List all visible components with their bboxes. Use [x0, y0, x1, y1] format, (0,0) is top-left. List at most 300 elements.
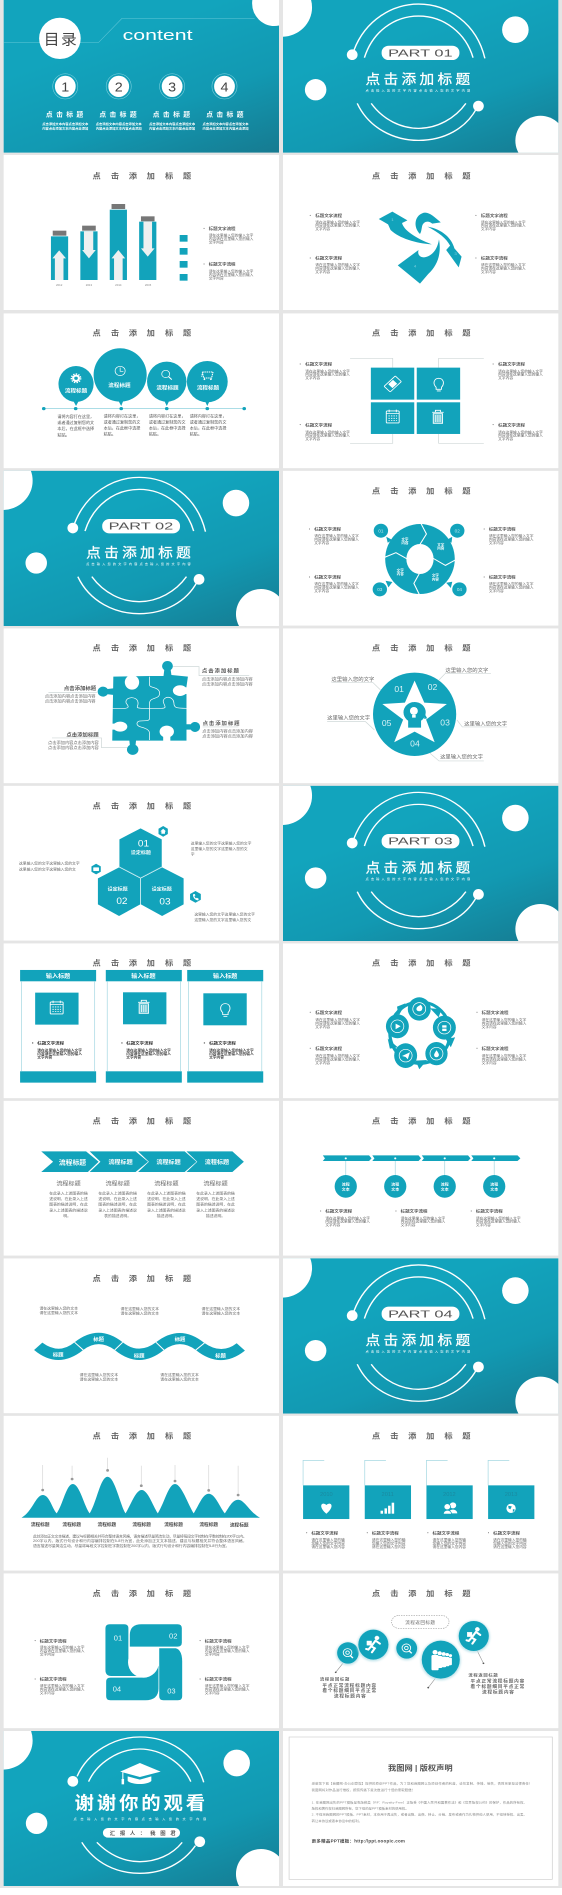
text block 2: 请在这里输入您的输入文字: [305, 430, 350, 434]
text left: 平点正常流程标题内容: [322, 1682, 377, 1689]
decorative circles: [252, 766, 562, 954]
text block 3: 文字内容: [481, 226, 496, 231]
slide: part 04: [283, 1258, 558, 1414]
hexagon 02: 02: [116, 896, 128, 907]
card 2: [106, 970, 182, 1083]
text block 2: 标题文字流程: [305, 421, 333, 428]
text block 1: 标题文字流程: [315, 212, 343, 219]
item 1: 点击标题: [46, 110, 84, 118]
card 2: 请在这里输入您的输入文字: [126, 1049, 171, 1053]
star disc: 02: [428, 682, 438, 692]
subtitle: 点击输入您的文字内容点击输入您的文字内容: [365, 876, 470, 881]
subtitle: 点击输入您的文字内容点击输入您的文字内容: [86, 561, 191, 566]
text block 4: 文字内容: [498, 436, 513, 441]
text block 1: 标题文字流程: [305, 361, 333, 368]
hexagon 03: [141, 867, 184, 916]
node 1: [335, 1161, 357, 1198]
pinwheel graphic: 04: [113, 1685, 121, 1694]
captions: 或者通过复制您的文: [149, 419, 186, 424]
text block 2: 请在这里输入您的输入文字: [315, 263, 360, 267]
captions: 粘贴。: [190, 432, 202, 437]
text: lower right: 这里输入您的文字这里输入您的文: [194, 917, 252, 922]
card 2012: [426, 1460, 473, 1549]
text block 1: 文字内容: [40, 1652, 55, 1656]
callout: top right: 点击添加内容点击添加内容: [202, 681, 253, 687]
captions: 本后，在此框中选择: [104, 425, 140, 430]
hexagon 01: 01: [138, 839, 149, 850]
part label: [382, 834, 459, 848]
title: 点击添加标题: [93, 1588, 191, 1598]
text block 3: 内容请在这里输入您的输入: [205, 1648, 250, 1653]
item 3: 点击标题: [153, 110, 191, 118]
card 2011: 您输入您的文字内容: [372, 1541, 406, 1545]
subtitle: 点击输入您的文字内容点击输入您的文字内容: [74, 1816, 206, 1821]
text block 4: [484, 574, 534, 593]
dashed label: 流程返回标题: [405, 1619, 436, 1626]
card 2010: [303, 1460, 349, 1549]
card 2013: 您输入您的文字内容: [493, 1541, 527, 1545]
bubble 3: 流程标题: [156, 384, 179, 392]
card 2013: 请在这里输入您内容: [493, 1544, 527, 1549]
text block 1: 标题文字流程: [314, 526, 342, 533]
card 2011: 请在这里输入您内容: [372, 1544, 406, 1549]
title: 点击添加标题: [372, 643, 471, 653]
text block 2: 文字内容: [40, 1690, 55, 1695]
text block 1: [35, 1637, 85, 1656]
card 2: 输入标题: [131, 972, 156, 980]
text block 2: [395, 1208, 446, 1227]
title: 点击添加标题: [93, 171, 191, 180]
slide: three cards: [4, 944, 279, 1098]
text block 4: 文字内容: [205, 1690, 220, 1695]
square: trash icon: [417, 402, 460, 434]
section title: 点击添加标题: [365, 1333, 470, 1349]
bubble 1: [58, 366, 94, 406]
column 1: 在此录入上述图表的描: [49, 1191, 88, 1195]
callout: bottom left: [48, 731, 99, 750]
column 4: 流程标题: [203, 1180, 228, 1187]
title: 点击添加标题: [372, 1588, 471, 1598]
item 2: 2: [115, 79, 123, 95]
subtitle: 点击输入您的文字内容点击输入您的文字内容: [365, 1349, 470, 1354]
ring: 文字: [397, 568, 404, 572]
callout: top right: 点击添加内容点击添加内容: [202, 677, 253, 682]
item 2: 点击添加文本内容点击添加文本: [96, 121, 143, 126]
text block 3: 请在这里输入您的输入文字: [489, 534, 534, 538]
text block 2: 标题文字流程: [40, 1676, 67, 1683]
card 1: [20, 970, 96, 1083]
text block 2: [35, 1676, 85, 1695]
hexagon 01: 设定标题: [131, 849, 151, 856]
pinwheel graphic: 03: [167, 1687, 176, 1695]
paragraph: [33, 1534, 247, 1548]
year labels: 2014: [115, 283, 122, 287]
slide: part 03: [283, 786, 558, 941]
closing title: 谢谢你的观看: [75, 1793, 205, 1814]
column 1: 明。: [63, 1213, 71, 1218]
column 4: 描述说明。: [206, 1213, 225, 1218]
text: upper right: 字: [191, 852, 195, 857]
notice text: 2. 不得将我图网的PPT模板、PPT素材，本身用于再出售，或者出租、出借、转让、分销、发布或者作为礼物供他人使用，不得转授权、出卖、: [312, 1812, 527, 1817]
year labels: 2013: [86, 283, 93, 287]
text left: 流程返回标题: [320, 1676, 350, 1682]
paragraph: 200字以内，版式行句设计和行内容编排控制在5-8行为宜，此处添加正文文本描述，建议与标题相关并符合整体语言风格，: [33, 1538, 247, 1543]
bubble: runner left: [357, 1629, 390, 1661]
column 2: [98, 1180, 137, 1218]
text block 4: 请在这里输入您的输入文字: [482, 1054, 526, 1058]
wave: [34, 1333, 245, 1360]
text block 4: 内容请在这里输入您的输入: [205, 1686, 250, 1691]
ring: [384, 524, 455, 594]
node 3: 流程: [441, 1183, 449, 1187]
chevron row: 流程标题: [59, 1158, 86, 1166]
card 3: 标题文字流程: [209, 1040, 237, 1047]
node 02: 02: [455, 529, 460, 533]
text block 1: 内容请在这里输入您的输入: [325, 1219, 370, 1224]
item 3: 内容点击添加文本内容点击添加: [149, 126, 195, 131]
chart labels: [31, 1521, 249, 1528]
node 2: [384, 1161, 406, 1198]
node 03: [373, 581, 392, 596]
text block 3: 文字内容: [498, 375, 513, 380]
part label: PART 03: [388, 836, 453, 848]
captions: 本后，在此框中选择: [190, 425, 226, 430]
text block 4: 标题文字流程: [498, 421, 526, 428]
labels: [327, 666, 507, 761]
icon: graduation cap: [120, 1763, 161, 1784]
title: 点击添加标题: [372, 328, 471, 338]
text block 3: 标题文字流程: [489, 526, 516, 533]
slide: swirl arrows: [283, 155, 558, 310]
node 1: 流程: [342, 1183, 350, 1187]
captions: [39, 1305, 240, 1382]
ring arcs: [347, 792, 485, 929]
captions: 请在这里输入您的文本: [121, 1311, 159, 1316]
callout: right: 点击添加标题: [203, 719, 240, 727]
text block 2: 内容请在这里输入您的输入: [315, 1056, 360, 1061]
year labels: 2015: [145, 283, 152, 287]
text block 2: 内容请在这里输入您的输入: [209, 272, 254, 277]
text block 1: 文字内容: [315, 226, 331, 231]
slide: part 02: [4, 470, 279, 626]
item 2: 点击标题: [99, 110, 137, 118]
slide: pinwheel: [4, 1574, 279, 1728]
captions: 粘贴。: [57, 432, 70, 437]
callout: left: 点击添加标题: [64, 684, 97, 692]
text block 3: 文字内容: [489, 540, 504, 545]
text block 1: 标题文字流程: [315, 1009, 343, 1016]
heading: content: content: [123, 28, 194, 44]
text left: 流程标题内容: [334, 1692, 367, 1699]
labels: 这里输入您的文字: [440, 753, 483, 761]
card 1: 标题文字流程: [37, 1040, 65, 1047]
node 02: [447, 524, 464, 543]
text block 4: 文字内容: [489, 588, 504, 593]
text left: 看个标题细目平点正常: [322, 1687, 377, 1694]
chevron row: 流程标题: [156, 1158, 181, 1166]
text block 1: 标题文字流程: [40, 1637, 67, 1644]
callout: top right: 点击添加标题: [202, 667, 240, 675]
section title: 点击添加标题: [86, 546, 191, 561]
card 2010: 请在这里输入您的输: [311, 1538, 345, 1542]
text block 1: 请在这里输入您的输入文字: [315, 220, 360, 224]
text block 3: 请在这里输入您的输入文字: [481, 220, 526, 224]
square: bulb icon: [417, 368, 460, 400]
text: lower right: 这里输入您的文字这里输入您的文字: [194, 912, 255, 916]
captions: 或者通过复制您的文: [190, 419, 226, 424]
bubble 2: [94, 348, 147, 406]
slide: mountains: [4, 1416, 279, 1570]
text block 3: 标题文字流程: [481, 212, 508, 219]
notice text: [312, 1781, 532, 1823]
node 4: [483, 1161, 505, 1198]
text block 4: 请在这里输入您的输入文字: [498, 430, 543, 434]
hexagon 02: [98, 867, 140, 916]
text block 3: [200, 1637, 250, 1656]
captions: 本后，在此框中选择: [149, 425, 186, 430]
callout lines: [48, 667, 249, 748]
card 2012: 2012: [443, 1492, 456, 1498]
bubble: target mid: [395, 1638, 418, 1660]
text block 2: [309, 574, 359, 593]
text block 1: 内容请在这里输入您的输入: [40, 1648, 85, 1653]
node 4: 流程: [490, 1183, 498, 1187]
ring: 文字: [401, 537, 408, 541]
captions: 请在这里输入您的文本: [160, 1373, 199, 1377]
pinwheel graphic: 02: [169, 1632, 177, 1640]
slide: cycle diagram: [283, 471, 558, 626]
heading: 目录: 目录: [44, 32, 77, 49]
text block 2: 标题文字流程: [315, 255, 343, 262]
title: 点击添加标题: [372, 486, 471, 495]
captions: 请在这里输入您的文本: [121, 1307, 159, 1311]
chart labels: 流程标题: [62, 1521, 82, 1528]
node 3: 文本: [441, 1187, 449, 1192]
text block 3: [484, 526, 534, 545]
text block 4: 内容请在这里输入您的输入: [481, 265, 526, 270]
text block 1: 内容请在这里输入您的输入: [305, 372, 350, 377]
slide: four squares: [283, 314, 558, 468]
node 4: 文本: [490, 1187, 498, 1192]
bubble 4: 流程标题: [197, 384, 220, 392]
chart labels: 流程标题: [230, 1522, 249, 1528]
callout: right: 点击添加内容点击添加内容: [202, 728, 253, 733]
corner circle: [252, 0, 297, 26]
value tags: [53, 204, 155, 236]
wave: 标题: [175, 1335, 186, 1343]
loop graphic: [386, 997, 456, 1069]
node 2: 流程: [391, 1183, 399, 1187]
column 1: [49, 1180, 88, 1218]
item 4: [203, 74, 249, 131]
text block 4: 标题文字流程: [489, 574, 516, 581]
decorative circles: [252, 1239, 562, 1427]
captions: 请在这里输入您的文本: [202, 1307, 240, 1311]
text block 1: [320, 1208, 370, 1227]
card 2013: 标题文字流程: [493, 1530, 521, 1536]
text block 2: 文字内容: [314, 588, 330, 593]
text block 2: 标题文字流程: [209, 261, 236, 268]
decorative circles: [252, 0, 562, 166]
item 3: 3: [168, 79, 176, 95]
bubble: target small: [336, 1642, 360, 1665]
item 1: [42, 74, 89, 131]
connectors: [350, 358, 484, 443]
legend squares: [180, 235, 188, 281]
text block 3: 标题文字流程: [205, 1637, 232, 1644]
text block 2: 标题文字流程: [314, 574, 342, 581]
text block 1: 请在这里输入您的输入文字: [325, 1216, 370, 1220]
card 2013: 2013: [505, 1492, 517, 1498]
text block 4: 内容请在这里输入您的输入: [489, 585, 534, 589]
callout: bottom left: 点击添加内容点击添加内容: [48, 740, 99, 745]
text block 2: 内容请在这里输入您的输入: [401, 1219, 446, 1224]
captions: 请将内容打在这里，: [190, 413, 226, 418]
text block 2: 请在这里输入您的输入文字: [209, 270, 253, 274]
text block 3: 请在这里输入您的输入文字: [476, 1216, 521, 1220]
captions: 粘贴。: [149, 432, 161, 437]
text block 1: 内容请在这里输入您的输入: [315, 1020, 360, 1025]
square: ticket icon: [371, 368, 414, 400]
hexagon 01: [119, 828, 162, 878]
card 2013: 请在这里输入您的输: [493, 1538, 527, 1542]
column 1: 流程标题: [56, 1180, 81, 1187]
puzzle graphic: [98, 661, 200, 755]
link line: 更多精品PPT模板：http://ppt.ooopic.com: [312, 1838, 405, 1844]
text block 3: [475, 212, 526, 231]
item 3: [149, 74, 196, 131]
callout: right: 点击添加内容点击添加内容: [202, 732, 253, 738]
notice text: 转让本协议或者本协议中的权利。: [312, 1818, 362, 1823]
notice text: 感谢您下载【我图网-办公创意馆】提供的原创PPT作品，为了您和我图网以及原创作者的利益，请勿复制、传播、销售，否则将承担法律责任！: [312, 1781, 532, 1786]
card 2011: 2011: [382, 1492, 394, 1498]
text block 2: 标题文字流程: [401, 1208, 428, 1215]
captions: 请将内容打在这里，: [57, 414, 94, 419]
section title: 点击添加标题: [365, 861, 470, 876]
captions: 请将内容打在这里，: [149, 413, 186, 418]
ring: 内容: [397, 571, 404, 576]
small hex: mail: [91, 864, 101, 874]
captions: 请在这里输入您的文本: [160, 1377, 199, 1382]
column 4: [196, 1180, 235, 1218]
area chart: [22, 1477, 260, 1518]
captions: 本后，在此框中选择: [57, 426, 94, 431]
frame: [289, 1737, 552, 1879]
text block 2: 内容请在这里输入您的输入: [314, 585, 359, 589]
chevron row: 流程标题: [205, 1158, 229, 1166]
text block 2: 文字内容: [209, 276, 224, 280]
paragraph: 此处添加正文文本描述，建议与标题相关并符合整体语言风格，语言描述尽量简洁生动，尽量将每段文字控制在字数控制在200字以内。: [33, 1534, 247, 1538]
slide: puzzle: [4, 628, 279, 783]
chart labels: 流程标题: [31, 1521, 50, 1528]
text block 2: 内容请在这里输入您的输入: [305, 433, 350, 438]
text block 1: 请在这里输入您的输入文字: [315, 1018, 360, 1022]
captions: 或者通过复制您的文: [57, 420, 94, 425]
title: 点击添加标题: [93, 643, 191, 653]
captions: 请将内容打在这里，: [104, 413, 140, 418]
notice text: 版权和著作权归我图网所有，您下载的是PPT模板素材的使用权。: [312, 1805, 409, 1810]
card 2011: 标题文字流程: [372, 1530, 399, 1536]
bubble 1: 流程标题: [65, 387, 88, 395]
card 2: 标题文字流程: [126, 1040, 154, 1047]
notice text: 我图网将对作品进行维权，按照传播下载次数进行十倍的索取赔偿！: [312, 1787, 415, 1792]
ring: 内容: [437, 546, 445, 551]
text block 3: 请在这里输入您的输入文字: [482, 1018, 526, 1022]
card 1: 文字内容: [37, 1055, 53, 1059]
slide: wave ribbon: [4, 1258, 279, 1413]
captions: 请在这里输入您的文本: [80, 1373, 118, 1377]
ring arcs: [67, 477, 205, 614]
text block 4: 请在这里输入您的输入文字: [205, 1684, 249, 1688]
hexagon 03: 设定标题: [152, 886, 172, 893]
pinwheel graphic: [105, 1624, 182, 1700]
heading: 目录: [39, 18, 81, 59]
card 3: [187, 970, 263, 1083]
node 3: [434, 1161, 456, 1198]
wave: 标题: [134, 1352, 145, 1359]
text block 3: [476, 1009, 527, 1029]
leader dots: [335, 1662, 484, 1688]
heading: 我图网 | 版权声明: [388, 1763, 453, 1772]
text block 1: [310, 212, 360, 231]
chevron row: [41, 1151, 244, 1172]
decorative circles: [0, 1711, 286, 1895]
column 3: 描述说明。: [157, 1213, 176, 1218]
column 1: 述说明，在此录入上述: [49, 1196, 88, 1201]
star disc: 05: [382, 718, 392, 728]
captions: [57, 413, 226, 437]
hexagon 03: 03: [159, 897, 171, 908]
text right: 平点正常流程标题内容: [471, 1678, 525, 1685]
title: 点击添加标题: [93, 1431, 191, 1441]
bars: [51, 210, 156, 280]
hexagon 02: 设定标题: [108, 886, 128, 893]
column 4: 录入上述图表的描述说: [196, 1208, 235, 1212]
column 4: 图表的描述说明，在此: [196, 1202, 235, 1207]
text: left: 这里输入您的文字这里输入您的文: [19, 867, 76, 871]
card 2012: 请在这里输入您内容: [433, 1544, 466, 1549]
chart labels: 流程标题: [199, 1521, 219, 1528]
text block 1: 内容请在这里输入您的输入: [315, 223, 360, 228]
labels: 这里输入您的文字: [445, 666, 488, 674]
star disc: 03: [440, 718, 450, 727]
dashed label: [392, 1616, 449, 1628]
card 2: 文字内容: [126, 1055, 142, 1059]
swirl graphic: [379, 212, 462, 284]
text block 1: 文字内容: [209, 240, 224, 244]
text block 1: 内容请在这里输入您的输入: [314, 537, 359, 541]
text right: 看个标题细目平点正常: [471, 1683, 525, 1690]
part label: [382, 1307, 459, 1321]
item 1: 点击添加文本内容点击添加文本: [42, 121, 89, 126]
node 04: [446, 582, 467, 596]
text block 3: [471, 1208, 521, 1227]
card 2010: 您输入您的文字内容: [311, 1541, 345, 1545]
text block 1: 请在这里输入您的输入文字: [314, 534, 359, 538]
title: 点击添加标题: [93, 801, 191, 810]
node 04: 04: [457, 587, 463, 592]
column 1: 录入上述图表的描述说: [49, 1208, 88, 1212]
bubble 4: [187, 361, 228, 406]
year labels: [56, 283, 152, 287]
card 2010: 请在这里输入您内容: [311, 1544, 345, 1549]
slide: hexagons: [4, 786, 279, 940]
title: 点击添加标题: [93, 958, 191, 968]
slide: part 01: [283, 0, 558, 153]
card 1: 输入标题: [46, 972, 70, 980]
slide: chevrons: [4, 1101, 279, 1256]
text block 4: 标题文字流程: [205, 1676, 232, 1683]
